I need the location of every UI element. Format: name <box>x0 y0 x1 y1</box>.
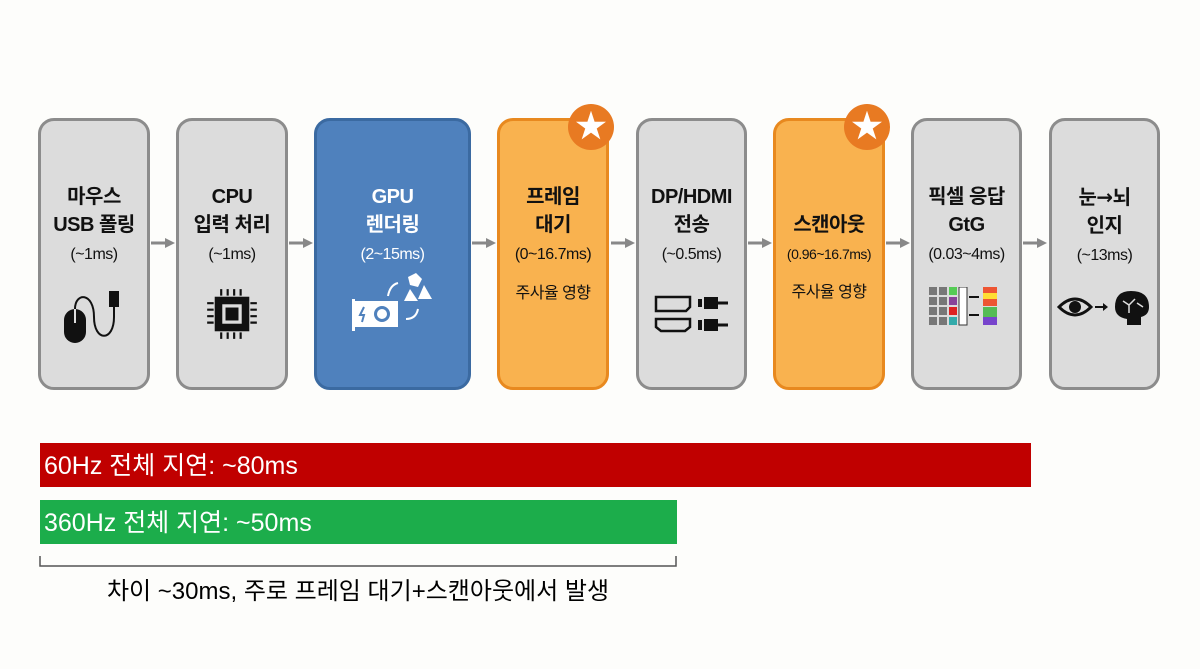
box: cpu: (~1ms) <box>208 246 256 263</box>
box: cpu: 입력 처리 <box>194 214 270 236</box>
box: pixel response: 픽셀 응답 <box>928 186 1005 208</box>
box: frame wait: (0~16.7ms) <box>515 246 591 263</box>
box: cpu: CPU <box>212 186 252 208</box>
icon: chip <box>207 289 257 339</box>
box: frame wait: 프레임 <box>526 186 580 208</box>
box: pixel response: (0.03~4ms) <box>928 246 1005 263</box>
bar: 360Hz: 360Hz 전체 지연: ~50ms <box>44 509 312 537</box>
box: eye to brain: 눈→뇌 <box>1078 185 1131 209</box>
box: dp/hdmi: 전송 <box>674 214 709 236</box>
box: mouse: (~1ms) <box>70 246 118 263</box>
icon: ports <box>654 296 728 332</box>
arrow <box>289 238 313 248</box>
box: frame wait <box>497 118 609 390</box>
box: gpu: (2~15ms) <box>360 246 425 263</box>
arrow <box>1023 238 1047 248</box>
box: mouse: USB 폴링 <box>53 214 135 236</box>
box: dp/hdmi <box>636 118 747 390</box>
box: eye to brain: (~13ms) <box>1077 247 1132 264</box>
bar: 60Hz: 60Hz 전체 지연: ~80ms <box>44 452 298 480</box>
box: scanout: 스캔아웃 <box>793 214 865 236</box>
icon: pixel grid <box>929 287 997 326</box>
arrow <box>886 238 910 248</box>
box: cpu <box>176 118 288 390</box>
icon: star badge <box>568 104 614 150</box>
bar: 60Hz <box>40 443 1031 487</box>
icon: eye and brain <box>1057 291 1149 325</box>
arrow <box>151 238 175 248</box>
box: mouse <box>38 118 150 390</box>
caption: 차이 ~30ms, 주로 프레임 대기+스캔아웃에서 발생 <box>107 578 609 605</box>
box: eye to brain: 인지 <box>1087 215 1122 237</box>
box: scanout <box>773 118 885 390</box>
arrow <box>611 238 635 248</box>
icon: gpu <box>352 273 432 331</box>
icon: star badge: ★ <box>575 108 607 144</box>
icon: star badge: ★ <box>851 108 883 144</box>
box: gpu: GPU <box>372 186 413 208</box>
box: frame wait: 대기 <box>535 214 571 236</box>
icon: star badge <box>844 104 890 150</box>
box: eye to brain <box>1049 118 1160 390</box>
arrow <box>472 238 496 248</box>
box: pixel response: GtG <box>948 214 985 236</box>
box: gpu: 렌더링 <box>366 214 419 236</box>
box: mouse: 마우스 <box>67 186 121 208</box>
arrow <box>748 238 772 248</box>
box: dp/hdmi: DP/HDMI <box>651 186 732 208</box>
bar: 360Hz <box>40 500 677 544</box>
icon: mouse <box>64 291 119 343</box>
box: scanout: 주사율 영향 <box>791 284 867 301</box>
box: pixel response <box>911 118 1022 390</box>
box: frame wait: 주사율 영향 <box>515 285 591 302</box>
box: dp/hdmi: (~0.5ms) <box>662 246 721 263</box>
bracket <box>39 556 677 567</box>
box: gpu <box>314 118 471 390</box>
box: scanout: (0.96~16.7ms) <box>787 246 871 262</box>
